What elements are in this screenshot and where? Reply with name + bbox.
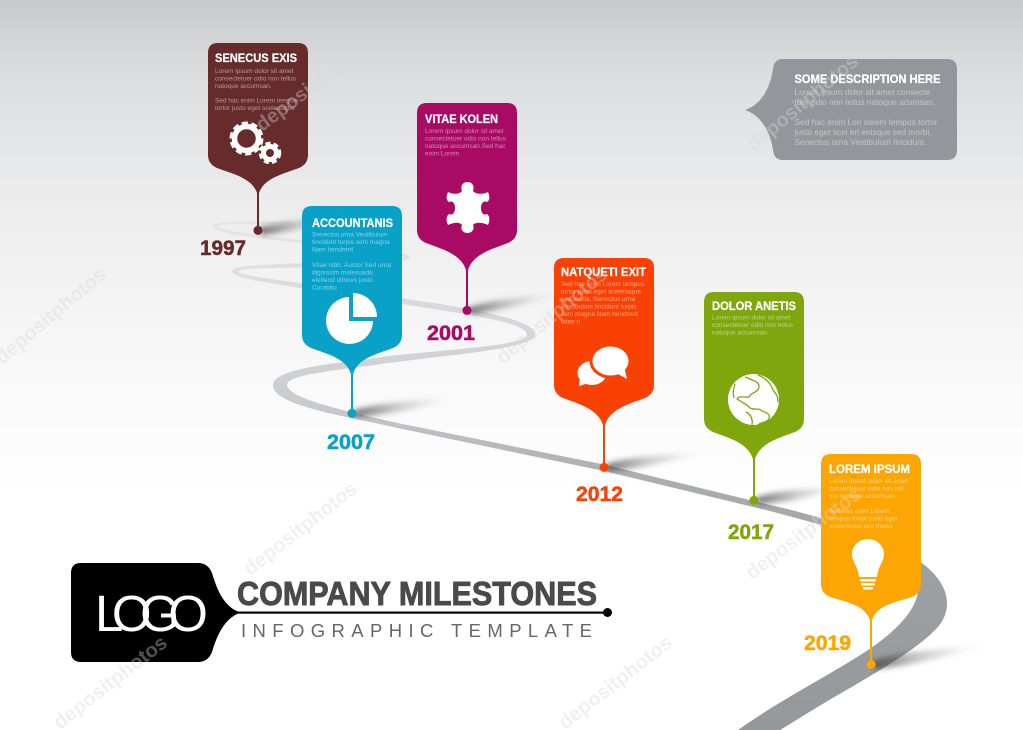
year 2001: 2001 bbox=[427, 322, 475, 345]
pin shape bbox=[821, 454, 921, 669]
body text: consectetuer odio non tellus bbox=[425, 136, 507, 142]
heading: ACCOUNTANIS bbox=[312, 216, 393, 230]
body text: enim Lorem bbox=[425, 150, 459, 158]
body text: Vitae nibh. Auctor Sed urna bbox=[312, 262, 391, 269]
icon: puzzle piece bbox=[447, 182, 489, 233]
body text: Sed hac enim Lorem tempus bbox=[561, 281, 645, 288]
body text: tus natoque accumsan. bbox=[829, 493, 896, 500]
watermarks: depositphotos bbox=[743, 50, 863, 156]
body text: Nam hendrerit bbox=[312, 246, 353, 254]
title rule bbox=[235, 608, 612, 617]
winding road bbox=[213, 221, 947, 730]
bubble body: tuer odio non tellus natoque acumsan. bbox=[794, 97, 935, 107]
pin shape bbox=[208, 43, 308, 235]
body text: consectetuer odio non tellus bbox=[712, 322, 794, 329]
description bubble bbox=[745, 59, 957, 160]
pin shape bbox=[417, 103, 517, 315]
pin shape bbox=[554, 258, 654, 472]
pin: 2012 Natqueti Exit bbox=[554, 258, 654, 506]
bubble body: justo eget scel eri enisque sed morbi. bbox=[794, 127, 931, 137]
year 2007: 2007 bbox=[327, 431, 375, 454]
icon: gears bbox=[232, 124, 280, 162]
body text: Curabitu bbox=[312, 284, 337, 292]
icon: globe bbox=[728, 374, 779, 425]
body text: dignissim malesuada bbox=[312, 270, 373, 276]
year 1997: 1997 bbox=[200, 237, 246, 260]
bubble body: Senectus urna Vestibulum tincidunt. bbox=[794, 137, 926, 147]
pin: 2017 Dolor Anetis bbox=[704, 292, 804, 544]
year 2019: 2019 bbox=[804, 632, 851, 655]
icon: pie chart bbox=[326, 293, 377, 344]
body text: tincidunt turpis sem magna bbox=[312, 239, 390, 246]
heading: VITAE KOLEN bbox=[425, 112, 498, 126]
body text: consectetuer odio non tell bbox=[829, 486, 904, 492]
pin: 2007 Accountanis bbox=[302, 206, 402, 454]
logo and title block bbox=[71, 563, 612, 662]
logo text: LOGO bbox=[95, 585, 206, 642]
body text: consectetuer odio non tellus bbox=[215, 76, 297, 82]
body text: Sed hac enim Lorem bbox=[829, 508, 889, 515]
bubble shape bbox=[745, 59, 957, 160]
body text: vitae n bbox=[561, 318, 581, 326]
body text: eleifend ultrices justo bbox=[312, 277, 373, 284]
watermarks: depositphotos bbox=[252, 36, 375, 136]
body text: Sed hac enim Lorem tempus bbox=[215, 98, 299, 104]
icon: speech bubbles bbox=[578, 345, 630, 386]
bubble body: Sed hac enim Lori steem tempus tortor bbox=[794, 117, 938, 127]
body text: tortor justo eget scelerisque bbox=[561, 288, 641, 296]
body text: Lorem ipsum dolor sit amet bbox=[712, 314, 791, 322]
title: COMPANY MILESTONES bbox=[237, 575, 597, 612]
bubble body: Lorem ipsum dolor sit amet consecte bbox=[794, 87, 930, 97]
heading: NATQUETI EXIT bbox=[561, 265, 647, 279]
pin: 2019 Lorem Ipsum bbox=[804, 454, 921, 669]
heading: LOREM IPSUM bbox=[829, 462, 910, 476]
pin: 1997 Senecus Exis bbox=[200, 43, 308, 260]
body text: Lorem ipsum dolor sit amet bbox=[215, 68, 294, 75]
subtitle: INFOGRAPHIC TEMPLATE bbox=[241, 620, 592, 641]
logo tag bbox=[71, 563, 238, 662]
body text: Vestibulum tincidunt turpis bbox=[561, 304, 637, 310]
body text: scelerisque sed morbi bbox=[829, 523, 892, 530]
year 2012: 2012 bbox=[576, 483, 623, 506]
body text: natoque accumsan. bbox=[215, 83, 272, 90]
bubble heading: SOME DESCRIPTION HERE bbox=[794, 72, 940, 86]
watermarks: depositphotos bbox=[240, 478, 362, 580]
body text: natoque accumsan.Sed hac bbox=[425, 143, 506, 150]
icon: light bulb bbox=[852, 539, 884, 590]
heading: SENECUS EXIS bbox=[215, 51, 297, 65]
body text: tortor justo eget scelerisque bbox=[215, 105, 295, 112]
heading: DOLOR ANETIS bbox=[712, 299, 796, 313]
body text: Senectus urna Vestibulum bbox=[312, 232, 388, 238]
pin: 2001 Vitae Kolen bbox=[417, 103, 517, 345]
year 2017: 2017 bbox=[728, 521, 774, 544]
watermarks: depositphotos bbox=[742, 484, 865, 584]
watermarks: depositphotos bbox=[492, 263, 612, 369]
pin shape bbox=[302, 206, 402, 418]
pin shadows bbox=[258, 217, 985, 669]
body text: sed morbi. Senectus urna bbox=[561, 296, 635, 303]
body text: Lorem ipsum dolor sit amet bbox=[829, 478, 908, 485]
body text: tempus tortor justo eget bbox=[829, 516, 897, 522]
pin shape bbox=[704, 292, 804, 505]
body text: sem magna Nam hendrerit bbox=[561, 311, 638, 318]
body text: Lorem ipsum dolor sit amet bbox=[425, 128, 504, 135]
body text: natoque accumsan. bbox=[712, 330, 769, 336]
